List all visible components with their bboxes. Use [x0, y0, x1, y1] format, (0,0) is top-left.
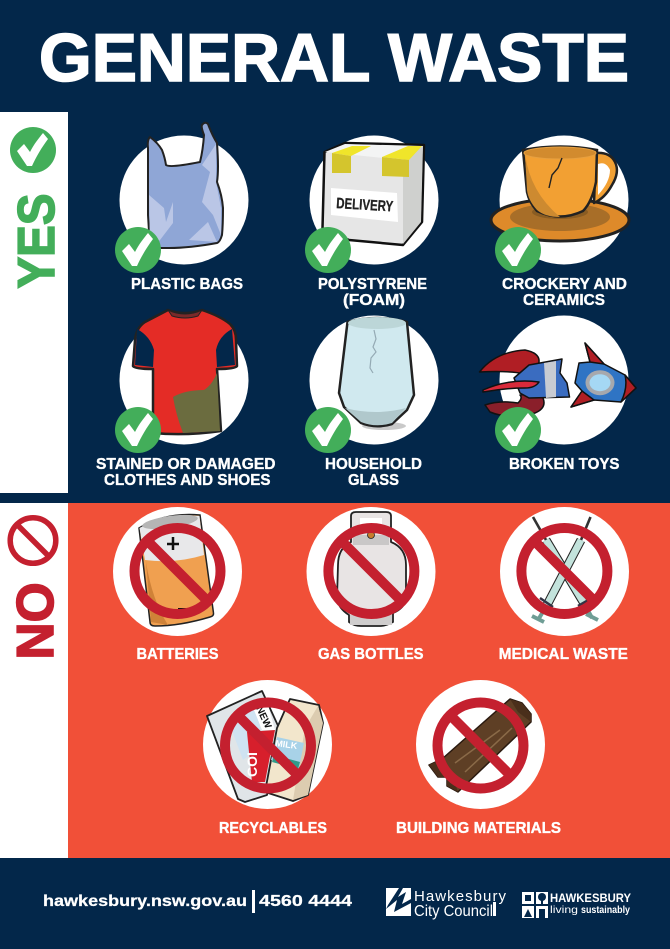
label line 2: CLOTHES AND SHOES	[104, 472, 270, 489]
label line 2: CERAMICS	[523, 292, 605, 309]
panel: no	[0, 503, 670, 858]
item: medical waste	[499, 507, 629, 663]
icon: cracked cup	[491, 146, 629, 241]
item: batteries	[113, 507, 242, 663]
item: crockery and ceramics	[491, 136, 629, 309]
icon: check badge	[305, 227, 351, 273]
no panel background	[68, 503, 670, 858]
panel: yes	[0, 112, 636, 493]
logo: Hawkesbury living sustainably: sustainably	[581, 904, 630, 916]
no sidebar	[0, 503, 68, 858]
icon: prohibition sign	[521, 528, 607, 614]
icon: newspaper, cup and milk carton: COI	[244, 752, 260, 777]
item: plastic bags	[115, 123, 248, 293]
label: CROCKERY AND	[502, 276, 627, 293]
logo: Hawkesbury living sustainably: living	[550, 904, 578, 916]
label: BATTERIES	[136, 646, 218, 663]
label: HOUSEHOLD	[325, 456, 422, 473]
icon: prohibition sign	[438, 702, 524, 788]
item: stained clothes	[96, 310, 276, 489]
icon: stained shirt	[133, 310, 237, 434]
icon: check badge	[495, 227, 541, 273]
label: GAS BOTTLES	[318, 646, 424, 663]
phone: 4560 4444	[259, 893, 352, 910]
icon: cracked glass	[339, 317, 414, 430]
item: broken toys	[480, 316, 636, 473]
item: building materials	[396, 680, 561, 837]
icon: delivery box: DELIVERY	[336, 195, 394, 215]
icon: prohibition sign	[328, 528, 414, 614]
yes sidebar: YES	[8, 194, 66, 288]
icon: check badge	[115, 407, 161, 453]
label line 2: GLASS	[348, 472, 399, 489]
label: POLYSTYRENE	[318, 276, 427, 293]
icon: check badge	[305, 407, 351, 453]
label: RECYCLABLES	[219, 820, 327, 837]
icon: gas bottle	[337, 512, 406, 626]
icon: check badge	[495, 407, 541, 453]
label: MEDICAL WASTE	[499, 646, 628, 663]
icon: newspaper, cup and milk carton: MILK	[275, 738, 298, 751]
item: polystyrene foam	[305, 136, 438, 309]
logo: Hawkesbury living sustainably: HAWKESBURY	[550, 891, 631, 905]
footer	[43, 888, 631, 920]
icon: broken rocket	[480, 343, 636, 416]
label: BUILDING MATERIALS	[396, 820, 561, 837]
icon: battery	[139, 512, 214, 626]
logo: Hawkesbury City Council	[386, 888, 506, 920]
yes sidebar	[0, 112, 68, 493]
icon: delivery box	[322, 143, 424, 245]
label: PLASTIC BAGS	[131, 276, 243, 293]
item: recyclables	[203, 680, 332, 837]
logo: Hawkesbury living sustainably	[522, 891, 631, 918]
icon: prohibition sign	[134, 528, 220, 614]
icon: newspaper, cup and milk carton	[207, 691, 323, 802]
icon: timber	[429, 699, 531, 792]
icon: plastic bag	[148, 123, 223, 248]
no sidebar: NO	[7, 582, 65, 660]
label: BROKEN TOYS	[509, 456, 620, 473]
phone	[252, 890, 352, 913]
logo: Hawkesbury City Council: Hawkesbury	[414, 888, 506, 905]
icon: syringes	[532, 517, 598, 622]
item: household glass	[305, 316, 438, 489]
icon: newspaper, cup and milk carton: NEW	[253, 705, 273, 731]
item: gas bottles	[306, 507, 436, 663]
website: hawkesbury.nsw.gov.au	[43, 893, 247, 910]
icon: check badge	[115, 227, 161, 273]
icon: prohibition sign	[225, 702, 311, 788]
title: GENERAL WASTE	[39, 20, 629, 96]
label line 2: (FOAM)	[343, 292, 405, 309]
logo: Hawkesbury City Council: City Council	[414, 903, 493, 920]
label: STAINED OR DAMAGED	[96, 456, 276, 473]
